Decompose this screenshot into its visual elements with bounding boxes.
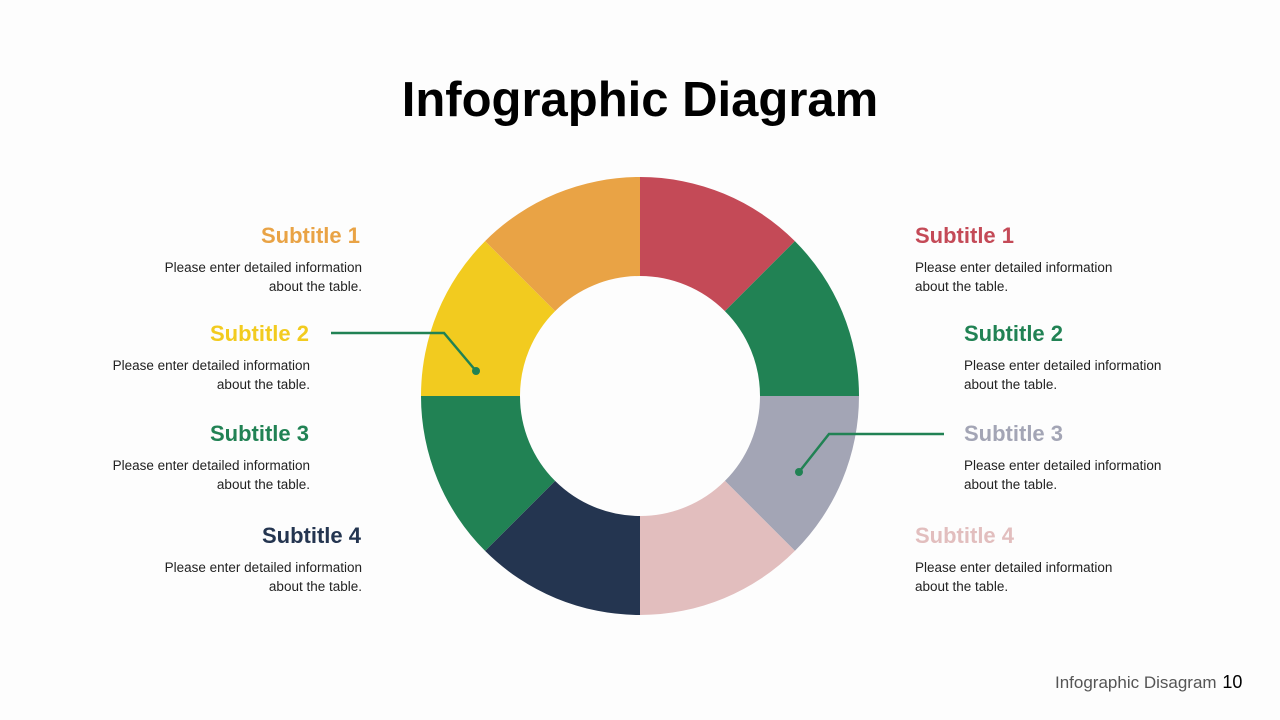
left item 4 (165, 523, 362, 594)
segment yellow (421, 241, 555, 396)
right item 2 (964, 321, 1161, 392)
right item 4: Please enter detailed information (915, 560, 1112, 575)
left item 4: Subtitle 4 (262, 523, 361, 548)
left item 1: Subtitle 1 (261, 223, 360, 248)
right item 1 (915, 223, 1112, 294)
connector right (795, 434, 944, 476)
left item 2: about the table. (217, 376, 310, 392)
left item 4: Please enter detailed information (165, 560, 362, 575)
segment green right (725, 241, 859, 396)
left item 1: Please enter detailed information (165, 260, 362, 275)
right item 2: Subtitle 2 (964, 321, 1063, 346)
left item 1 (165, 223, 362, 294)
title: Infographic Diagram (402, 73, 878, 127)
right item 4 (915, 523, 1112, 594)
right item 3: about the table. (964, 476, 1057, 492)
left item 3: about the table. (217, 476, 310, 492)
right item 4: Subtitle 4 (915, 523, 1014, 548)
segment orange (485, 177, 640, 311)
left item 2 (113, 321, 310, 392)
right item 2: about the table. (964, 376, 1057, 392)
right item 1: Subtitle 1 (915, 223, 1014, 248)
segment green left (421, 396, 555, 551)
left item 3: Please enter detailed information (113, 458, 310, 473)
connector left (331, 333, 480, 375)
segment red (640, 177, 795, 311)
right item 1: Please enter detailed information (915, 260, 1112, 275)
right item 3: Subtitle 3 (964, 421, 1063, 446)
left item 1: about the table. (269, 278, 362, 294)
left item 3 (113, 421, 310, 492)
right item 3 (964, 421, 1161, 492)
segment pink (640, 481, 795, 615)
right item 1: about the table. (915, 278, 1008, 294)
footer: Infographic Disagram 10 (1055, 672, 1242, 692)
left item 3: Subtitle 3 (210, 421, 309, 446)
segment navy (485, 481, 640, 615)
right item 4: about the table. (915, 578, 1008, 594)
right item 2: Please enter detailed information (964, 358, 1161, 373)
right item 3: Please enter detailed information (964, 458, 1161, 473)
left item 2: Subtitle 2 (210, 321, 309, 346)
segment gray (725, 396, 859, 551)
left item 2: Please enter detailed information (113, 358, 310, 373)
left item 4: about the table. (269, 578, 362, 594)
